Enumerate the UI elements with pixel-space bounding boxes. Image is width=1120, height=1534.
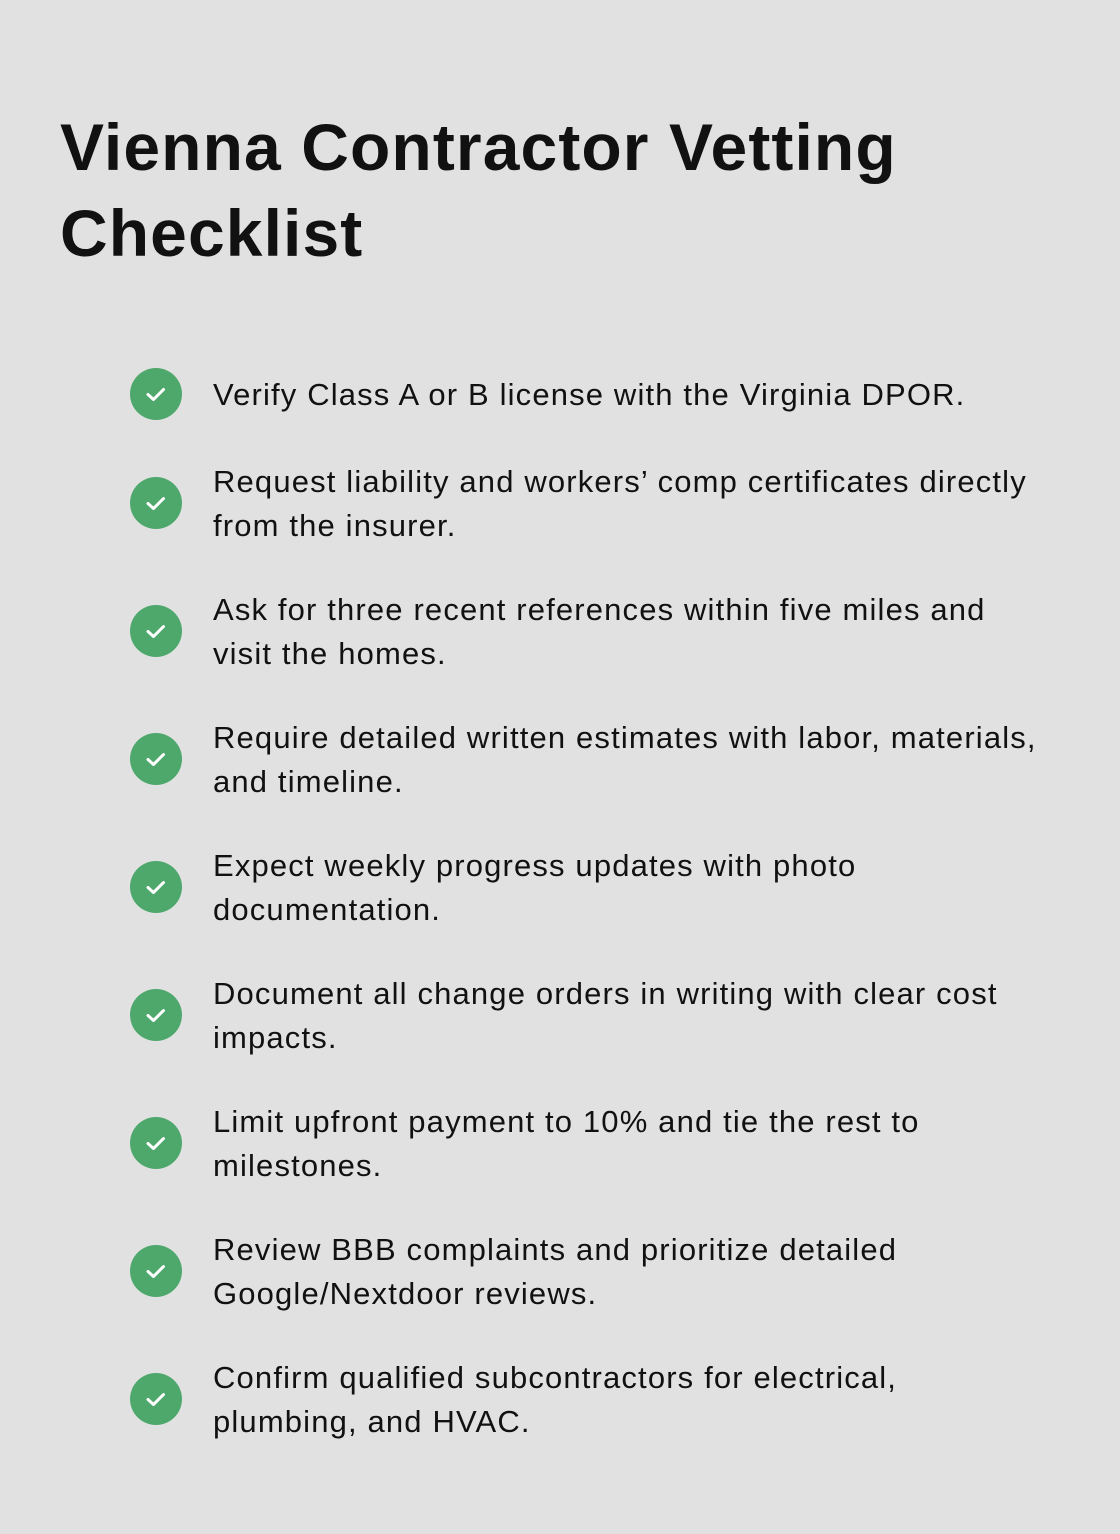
text: Review BBB complaints and prioritize detailed — [213, 1232, 897, 1267]
item 9 — [130, 1360, 897, 1439]
icon: check — [130, 1117, 182, 1169]
text: Limit upfront payment to 10% and tie the rest to — [213, 1104, 920, 1139]
icon: check — [130, 605, 182, 657]
text: impacts. — [213, 1020, 338, 1055]
title: Checklist — [60, 196, 363, 270]
text: documentation. — [213, 892, 441, 927]
icon: check — [130, 1373, 182, 1425]
item 4 — [130, 720, 1037, 799]
title — [60, 110, 897, 270]
text: from the insurer. — [213, 508, 457, 543]
text: Confirm qualified subcontractors for electrical, — [213, 1360, 897, 1395]
item 7 — [130, 1104, 920, 1183]
text: plumbing, and HVAC. — [213, 1404, 531, 1439]
text: Google/Nextdoor reviews. — [213, 1276, 597, 1311]
text: Document all change orders in writing with clear cost — [213, 976, 998, 1011]
icon: check — [130, 477, 182, 529]
text: Expect weekly progress updates with photo — [213, 848, 856, 883]
text — [213, 1232, 897, 1311]
icon: check — [130, 368, 182, 420]
item 1 — [130, 368, 965, 420]
text — [213, 976, 998, 1055]
text: milestones. — [213, 1148, 382, 1183]
title: Vienna Contractor Vetting — [60, 110, 897, 184]
text — [213, 1360, 897, 1439]
text: Verify Class A or B license with the Virginia DPOR. — [213, 377, 965, 412]
icon: check — [130, 989, 182, 1041]
text: Ask for three recent references within five miles and — [213, 592, 986, 627]
text — [213, 720, 1037, 799]
item 3 — [130, 592, 986, 671]
item 8 — [130, 1232, 897, 1311]
text — [213, 464, 1027, 543]
item 5 — [130, 848, 856, 927]
text — [213, 1104, 920, 1183]
text — [213, 848, 856, 927]
item 2 — [130, 464, 1027, 543]
icon: check — [130, 1245, 182, 1297]
text — [213, 592, 986, 671]
text: Request liability and workers’ comp certificates directly — [213, 464, 1027, 499]
icon: check — [130, 733, 182, 785]
item 6 — [130, 976, 998, 1055]
icon: check — [130, 861, 182, 913]
text: visit the homes. — [213, 636, 447, 671]
text: and timeline. — [213, 764, 404, 799]
text: Require detailed written estimates with labor, materials, — [213, 720, 1037, 755]
